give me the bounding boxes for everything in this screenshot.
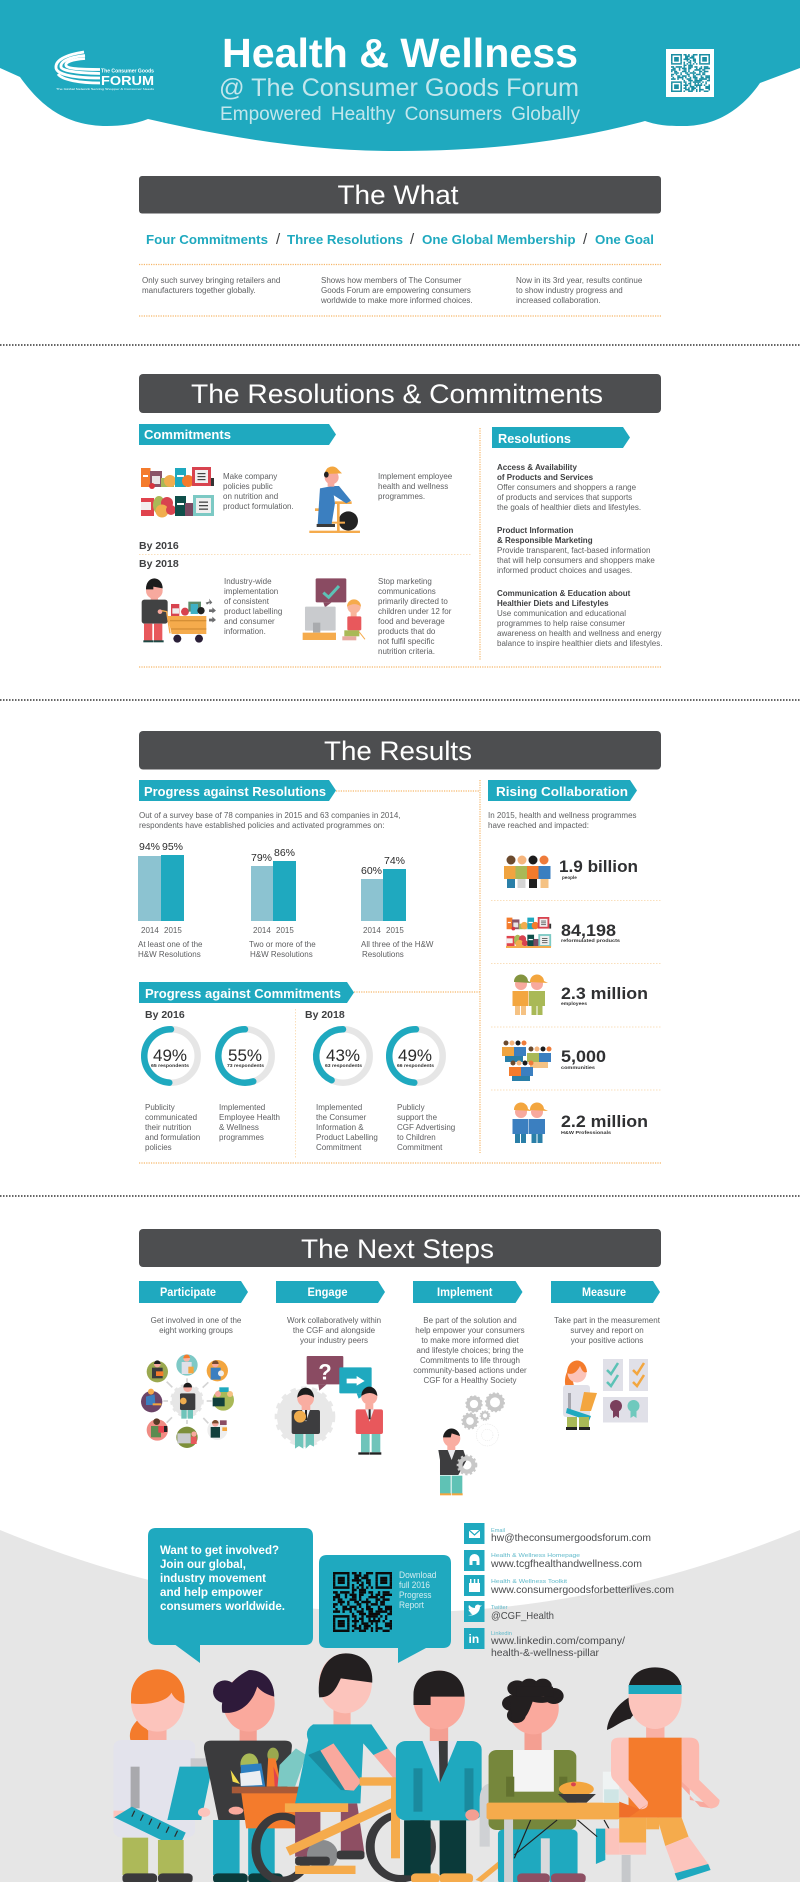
resolution: product information xyxy=(497,526,655,575)
contact: linkedin: health-&-wellness-pillar xyxy=(491,1648,600,1659)
QR code top right xyxy=(666,49,714,97)
text block: survey description xyxy=(142,276,280,295)
summary line: commitments, resolutions, membership, goal: / xyxy=(276,231,281,248)
logo: The Consumer Goods Forum: FORUM xyxy=(101,73,154,88)
bar chart: at least one resolution: 95% xyxy=(162,841,183,853)
contact: email: Email xyxy=(491,1528,505,1534)
person: runner in orange xyxy=(606,1667,720,1881)
text: participate: eight working groups xyxy=(159,1326,233,1335)
ribbon: Progress against Commitments: Progress against Commitments xyxy=(145,986,341,1001)
resolution: product information: that will help consumers and shoppers make xyxy=(497,556,655,565)
stat: 5,000 communities: communities xyxy=(561,1065,596,1070)
contact: toolkit xyxy=(464,1575,674,1596)
text: company policies xyxy=(223,472,294,511)
resolution: access and availability: Access & Availability xyxy=(497,463,577,472)
resolution: communication and education: awareness on health and wellness and energy xyxy=(497,629,662,638)
contact: linkedin: in xyxy=(468,1632,479,1646)
text: collaboration intro: In 2015, health and wellness programmes xyxy=(488,811,637,820)
icon: child at monitor with approval bubble xyxy=(303,578,365,640)
resolution: access and availability: Offer consumers and shoppers a range xyxy=(497,483,637,492)
label: By 2016: By 2016 xyxy=(139,540,179,552)
bar chart: two or more resolutions: 2015 xyxy=(276,926,294,935)
ribbon: Measure: Measure xyxy=(582,1287,626,1299)
text: marketing to children: Stop marketing xyxy=(378,577,432,586)
callout: download progress report QR: full 2016 xyxy=(399,1580,430,1590)
donut: 49 percent advertising xyxy=(389,1029,443,1083)
resolution: communication and education: Healthier Diets and Lifestyles xyxy=(497,599,609,608)
resolution: access and availability: of Products and Services xyxy=(497,473,594,482)
contact: twitter xyxy=(464,1601,554,1622)
stat: 1.9 billion people: people xyxy=(562,875,577,880)
text: survey base: respondents have established policies and activated programmes on: xyxy=(139,821,384,830)
icon: peers with speech bubbles: ? xyxy=(318,1359,332,1384)
callout: download progress report QR: Download xyxy=(399,1570,437,1580)
text: company policies: product formulation. xyxy=(223,502,294,511)
callout: want to get involved: and help empower xyxy=(160,1586,263,1599)
person: woman with clipboard and ruler xyxy=(113,1669,212,1882)
text: engage: Work collaboratively within xyxy=(287,1316,381,1325)
caption: labelling commitment xyxy=(316,1103,378,1152)
text: measure: Take part in the measurement xyxy=(554,1316,661,1325)
resolution: product information: Provide transparent, fact-based information xyxy=(497,546,650,555)
caption: employee wellness: Employee Health xyxy=(219,1113,280,1122)
resolution: communication and education xyxy=(497,589,662,648)
contact: twitter: @CGF_Health xyxy=(491,1611,554,1622)
text: engage: the CGF and alongside xyxy=(293,1326,376,1335)
section: The Results xyxy=(138,731,661,1163)
resolution: access and availability: of products and services that supports xyxy=(497,493,632,502)
text: implement: Be part of the solution and xyxy=(423,1316,517,1325)
text: measure: your positive actions xyxy=(571,1336,643,1345)
callout: download progress report QR: Report xyxy=(399,1600,425,1610)
caption: labelling commitment: the Consumer xyxy=(316,1113,367,1122)
text: measure: survey and report on xyxy=(570,1326,644,1335)
stat: 2.3 million employees: employees xyxy=(561,1001,587,1006)
text: product labelling: Industry-wide xyxy=(224,577,272,586)
heading bar: The What xyxy=(139,176,661,214)
donut: 49 percent communicated policies: 49% xyxy=(153,1046,187,1065)
text: engage: your industry peers xyxy=(300,1336,368,1345)
summary line: commitments, resolutions, membership, goal: / xyxy=(410,231,415,248)
person: man with bicycle xyxy=(256,1653,431,1880)
icon: employee on exercise bike xyxy=(309,466,360,533)
resolution: access and availability xyxy=(497,463,641,512)
person: man in teal jacket xyxy=(396,1671,506,1882)
stat: 1.9 billion people xyxy=(504,856,638,888)
stat: 2.2 million professionals: H&W Professionals xyxy=(561,1130,612,1135)
label: By 2016: By 2016 xyxy=(145,1009,185,1021)
resolution: communication and education: programmes to help raise consumer xyxy=(497,619,625,628)
resolution: communication and education: balance to inspire healthier diets and lifestyles. xyxy=(497,639,662,648)
stat: 2.3 million employees xyxy=(512,974,648,1015)
stat: 84,198 reformulated products: 84,198 xyxy=(561,921,616,940)
main title: Health & Wellness xyxy=(222,30,578,76)
donut: 55 percent employee wellness xyxy=(218,1029,272,1083)
contact: email: hw@theconsumergoodsforum.com xyxy=(491,1533,651,1544)
donut: 55 percent employee wellness: 73 respondents xyxy=(227,1063,265,1068)
text: product labelling: and consumer xyxy=(224,617,275,626)
bar chart: at least one resolution: At least one of the xyxy=(138,940,203,949)
text: implement: and lifestyle choices; bring the xyxy=(416,1346,524,1355)
caption: communicated policies: policies xyxy=(145,1143,172,1152)
logo: The Consumer Goods Forum: The Consumer Goods xyxy=(101,68,154,74)
caption: labelling commitment: Commitment xyxy=(316,1143,362,1152)
callout: download progress report QR: Progress xyxy=(399,1590,432,1600)
donut: 43 percent labelling: 43% xyxy=(326,1046,360,1065)
icon: groups of people xyxy=(502,1040,552,1081)
bar chart: two or more resolutions: 86% xyxy=(274,847,295,859)
text: marketing to children: communications xyxy=(378,587,436,596)
caption: advertising commitment: CGF Advertising xyxy=(397,1123,455,1132)
text: marketing to children: nutrition criteria. xyxy=(378,647,435,656)
resolution: product information: Product Information xyxy=(497,526,574,535)
caption: communicated policies xyxy=(145,1103,200,1152)
text: implement: to make more informed diet xyxy=(421,1336,519,1345)
callout: download progress report QR xyxy=(319,1555,451,1663)
contact: homepage: www.tcgfhealthandwellness.com xyxy=(490,1559,642,1570)
text: engage xyxy=(287,1316,381,1345)
icon: working groups circle xyxy=(141,1354,234,1448)
bar chart: two or more resolutions xyxy=(249,847,316,959)
heading bar: The Next Steps xyxy=(139,1229,661,1267)
icon: two employees xyxy=(512,974,548,1015)
icon: food products xyxy=(141,467,214,518)
section: The Next Steps xyxy=(139,1229,661,1495)
text: implement: CGF for a Healthy Society xyxy=(424,1376,516,1385)
stat: 2.2 million professionals xyxy=(512,1102,648,1143)
caption: advertising commitment: Commitment xyxy=(397,1143,443,1152)
text: collaboration intro xyxy=(488,811,637,830)
person: man seated at table xyxy=(480,1679,631,1882)
icon: woman with clipboard and scorecards xyxy=(563,1359,648,1430)
footer background xyxy=(0,1530,800,1882)
text: marketing to children: children under 12 for xyxy=(378,607,452,616)
text block: third year results xyxy=(516,276,643,305)
bar chart: all three resolutions xyxy=(361,855,434,959)
ribbon: Measure xyxy=(551,1281,660,1303)
ribbon: Rising Collaboration xyxy=(488,780,637,801)
callout: want to get involved: Join our global, xyxy=(160,1558,246,1571)
stat: 2.2 million professionals: 2.2 million xyxy=(561,1112,648,1131)
caption: employee wellness: programmes xyxy=(219,1133,264,1142)
summary line: commitments, resolutions, membership, goal: Four Commitments xyxy=(146,232,268,247)
contact: twitter: Twitter xyxy=(491,1605,508,1611)
ribbon: Resolutions xyxy=(492,427,630,448)
logo: The Consumer Goods Forum xyxy=(56,52,155,91)
stat: 84,198 reformulated products xyxy=(506,917,621,948)
ribbon: Commitments: Commitments xyxy=(144,427,231,442)
ribbon: Progress against Commitments xyxy=(139,982,354,1003)
bar chart: at least one resolution: 2015 xyxy=(164,926,182,935)
caption: communicated policies: Publicity xyxy=(145,1103,175,1112)
text: employee programmes: Implement employee xyxy=(378,472,453,481)
heading bar: The Results: The Results xyxy=(324,736,472,766)
icon: man with shopping cart xyxy=(142,578,216,643)
caption: labelling commitment: Implemented xyxy=(316,1103,362,1112)
text block: members empowering consumers: Goods Forum are empowering consumers xyxy=(321,286,471,295)
header banner xyxy=(0,0,800,151)
heading bar: The Resolutions & Commitments xyxy=(139,374,661,413)
text block: members empowering consumers: worldwide to make more informed choices. xyxy=(320,296,473,305)
stat: 2.3 million employees: 2.3 million xyxy=(561,984,648,1003)
contact: linkedin: www.linkedin.com/company/ xyxy=(490,1636,625,1647)
caption: communicated policies: their nutrition xyxy=(145,1123,191,1132)
donut: 49 percent communicated policies xyxy=(144,1029,198,1083)
ribbon: Implement xyxy=(413,1281,522,1303)
label: By 2018: By 2018 xyxy=(139,558,179,570)
text: marketing to children: food and beverage xyxy=(378,617,445,626)
bar chart: at least one resolution: 94% xyxy=(139,841,160,853)
stat: 1.9 billion people: 1.9 billion xyxy=(559,857,638,876)
resolution: product information: & Responsible Marketing xyxy=(497,536,593,545)
summary line: commitments, resolutions, membership, goal xyxy=(146,231,654,248)
text: marketing to children: products that do xyxy=(378,627,436,636)
text: participate: Get involved in one of the xyxy=(151,1316,242,1325)
bar chart: all three resolutions: All three of the H&W xyxy=(361,940,434,949)
text: survey base xyxy=(139,811,401,830)
summary line: commitments, resolutions, membership, goal: Three Resolutions xyxy=(287,232,403,247)
contact: homepage: Health & Wellness Homepage xyxy=(491,1553,580,1559)
text block: survey description: manufacturers together globally. xyxy=(142,286,256,295)
heading bar: The Results xyxy=(139,731,661,770)
donut: 49 percent advertising: 49% xyxy=(398,1046,432,1065)
caption: advertising commitment: to Children xyxy=(397,1133,436,1142)
stat: 5,000 communities xyxy=(502,1040,606,1081)
bar chart: at least one resolution xyxy=(138,841,203,959)
resolution: communication and education: Use communication and educational xyxy=(497,609,626,618)
donut: 49 percent advertising: 66 respondents xyxy=(397,1063,435,1068)
bar chart: all three resolutions: 2015 xyxy=(386,926,404,935)
ribbon: Implement: Implement xyxy=(437,1287,493,1299)
callout: want to get involved: industry movement xyxy=(160,1572,266,1585)
contact: toolkit: www.consumergoodsforbetterlives.com xyxy=(490,1585,674,1596)
text: employee programmes: health and wellness xyxy=(378,482,448,491)
heading bar: The Next Steps: The Next Steps xyxy=(301,1234,494,1264)
icon: four people xyxy=(504,856,550,888)
contact: toolkit: Health & Wellness Toolkit xyxy=(491,1579,568,1585)
bar chart: all three resolutions: 74% xyxy=(384,855,405,867)
resolution: access and availability: the goals of healthier diets and lifestyles. xyxy=(497,503,641,512)
text: implement xyxy=(413,1316,527,1385)
bar chart: at least one resolution: 2014 xyxy=(141,926,159,935)
resolution: communication and education: Communication & Education about xyxy=(497,589,631,598)
text block: survey description: Only such survey bringing retailers and xyxy=(142,276,280,285)
stat: 5,000 communities: 5,000 xyxy=(561,1047,606,1066)
caption: communicated policies: and formulation xyxy=(145,1133,200,1142)
ribbon: Participate xyxy=(139,1281,248,1303)
ribbon: Resolutions: Resolutions xyxy=(498,431,571,446)
caption: advertising commitment xyxy=(397,1103,455,1152)
text: product labelling: information. xyxy=(224,627,266,636)
icon: two professionals xyxy=(512,1102,548,1143)
ribbon: Rising Collaboration: Rising Collaboration xyxy=(496,784,628,799)
icon: man with gears xyxy=(438,1393,504,1495)
ribbon: Participate: Participate xyxy=(160,1287,216,1299)
callout: want to get involved xyxy=(148,1528,313,1663)
label: By 2018: By 2018 xyxy=(305,1009,345,1021)
text block: third year results: increased collaboration. xyxy=(516,296,600,305)
ribbon: Progress against Resolutions xyxy=(139,780,336,801)
text: product labelling: product labelling xyxy=(224,607,282,616)
text: participate xyxy=(151,1316,242,1335)
ribbon: Engage xyxy=(276,1281,385,1303)
summary line: commitments, resolutions, membership, goal: / xyxy=(583,231,588,248)
bar chart: two or more resolutions: 2014 xyxy=(253,926,271,935)
logo: The Consumer Goods Forum: The Global Network Serving Shopper & Consumer Needs xyxy=(56,87,155,91)
summary line: commitments, resolutions, membership, goal: One Goal xyxy=(595,232,654,247)
text block: third year results: to show industry progress and xyxy=(516,286,623,295)
caption: labelling commitment: Information & xyxy=(316,1123,364,1132)
text: implement: Commitments to life through xyxy=(420,1356,520,1365)
bar chart: all three resolutions: 2014 xyxy=(363,926,381,935)
subtitle line one: @ The Consumer Goods Forum xyxy=(219,74,579,102)
text: measure xyxy=(554,1316,661,1345)
caption: labelling commitment: Product Labelling xyxy=(316,1133,378,1142)
heading bar: The What: The What xyxy=(338,180,459,210)
resolution: product information: informed product choices and usages. xyxy=(497,566,632,575)
ribbon: Progress against Resolutions: Progress against Resolutions xyxy=(144,784,326,799)
section: The Resolutions & Commitments xyxy=(139,374,662,667)
text: marketing to children xyxy=(378,577,452,656)
donut: 43 percent labelling: 63 respondents xyxy=(325,1063,363,1068)
contact: linkedin xyxy=(464,1628,625,1659)
caption: communicated policies: communicated xyxy=(145,1113,197,1122)
caption: employee wellness: & Wellness xyxy=(219,1123,259,1132)
bar chart: at least one resolution: H&W Resolutions xyxy=(138,950,201,959)
ribbon: Commitments xyxy=(139,424,336,445)
text block: members empowering consumers xyxy=(320,276,473,305)
text: product labelling xyxy=(224,577,282,636)
icon: peers with speech bubbles xyxy=(277,1356,383,1455)
text: employee programmes: programmes. xyxy=(378,492,425,501)
caption: advertising commitment: support the xyxy=(397,1113,438,1122)
caption: advertising commitment: Publicly xyxy=(397,1103,425,1112)
illustration: group of six people xyxy=(113,1653,720,1882)
text block: members empowering consumers: Shows how members of The Consumer xyxy=(321,276,462,285)
donut: 43 percent labelling xyxy=(316,1029,370,1083)
contact: homepage xyxy=(464,1550,642,1571)
text: marketing to children: primarily directed to xyxy=(378,597,448,606)
text: survey base: Out of a survey base of 78 companies in 2015 and 63 companies in 2014, xyxy=(139,811,401,820)
caption: employee wellness xyxy=(219,1103,280,1142)
donut: 55 percent employee wellness: 55% xyxy=(228,1046,262,1065)
text: company policies: Make company xyxy=(223,472,277,481)
heading bar: The Resolutions & Commitments: The Resolutions & Commitments xyxy=(191,379,603,409)
text block: third year results: Now in its 3rd year, results continue xyxy=(516,276,643,285)
person: woman with food basket xyxy=(204,1670,306,1882)
contact: email xyxy=(464,1523,651,1544)
subtitle line two: Empowered Healthy Consumers Globally xyxy=(220,103,580,125)
text: collaboration intro: have reached and impacted: xyxy=(488,821,589,830)
bar chart: all three resolutions: 60% xyxy=(361,865,382,877)
bar chart: all three resolutions: Resolutions xyxy=(362,950,404,959)
text: product labelling: of consistent xyxy=(224,597,270,606)
bar chart: two or more resolutions: 79% xyxy=(251,852,272,864)
summary line: commitments, resolutions, membership, goal: One Global Membership xyxy=(422,232,576,247)
donut: 49 percent communicated policies: 65 respondents xyxy=(151,1063,190,1068)
bar chart: two or more resolutions: Two or more of the xyxy=(249,940,316,949)
stat: 84,198 reformulated products: reformulated products xyxy=(561,938,621,943)
ribbon: Engage: Engage xyxy=(308,1287,348,1299)
contact: linkedin: Linkedin xyxy=(491,1631,512,1637)
callout: want to get involved: Want to get involved? xyxy=(160,1544,279,1557)
text: product labelling: implementation xyxy=(224,587,278,596)
section: The What xyxy=(139,176,661,316)
text: employee programmes xyxy=(378,472,453,501)
text: implement: community-based actions under xyxy=(413,1366,527,1375)
text: company policies: on nutrition and xyxy=(223,492,278,501)
text: company policies: policies public xyxy=(223,482,273,491)
caption: employee wellness: Implemented xyxy=(219,1103,265,1112)
text: marketing to children: not fulfil specific xyxy=(378,637,434,646)
callout: want to get involved: consumers worldwide. xyxy=(160,1600,285,1613)
bar chart: two or more resolutions: H&W Resolutions xyxy=(250,950,313,959)
text: implement: help empower your consumers xyxy=(415,1326,525,1335)
